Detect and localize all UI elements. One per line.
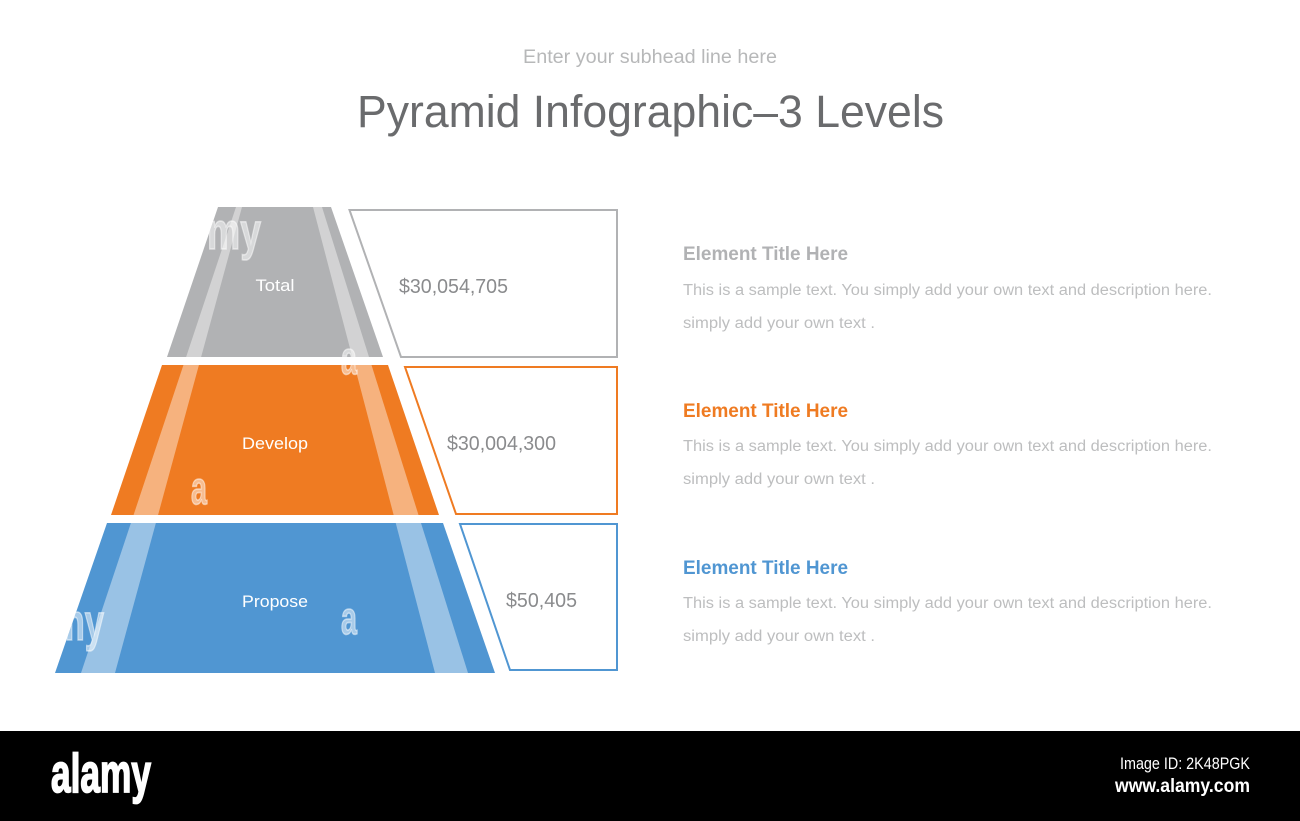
text block: element 3 bbox=[683, 558, 1212, 645]
text block: element 3: simply add your own text . bbox=[683, 628, 875, 645]
watermark fragments: a bbox=[341, 592, 357, 644]
watermark fragments: my bbox=[54, 594, 104, 652]
watermark fragments: a bbox=[191, 462, 207, 514]
watermark fragments: my bbox=[207, 203, 261, 261]
text block: element 2: Element Title Here bbox=[683, 401, 848, 422]
text block: element 1: Element Title Here bbox=[683, 244, 848, 265]
tier: develop: Develop bbox=[242, 434, 308, 453]
value box: total: $30,054,705 bbox=[399, 276, 508, 298]
tier: develop bbox=[111, 365, 439, 515]
value box: propose: $50,405 bbox=[506, 590, 577, 612]
text block: element 3: This is a sample text. You simply add your own text and description here. bbox=[683, 595, 1212, 612]
value box: develop: $30,004,300 bbox=[447, 433, 556, 455]
text block: element 2: This is a sample text. You simply add your own text and description here. bbox=[683, 438, 1212, 455]
text block: element 2: simply add your own text . bbox=[683, 471, 875, 488]
highlight stripes bbox=[81, 207, 468, 673]
pyramid bbox=[54, 203, 495, 673]
tier: propose: Propose bbox=[242, 592, 308, 611]
text block: element 1 bbox=[683, 244, 1212, 332]
subhead: Enter your subhead line here bbox=[523, 47, 777, 68]
watermark fragments bbox=[54, 203, 357, 652]
value box: total bbox=[350, 210, 617, 357]
text block: element 1: simply add your own text . bbox=[683, 315, 875, 332]
value box: develop bbox=[405, 367, 617, 514]
footer bar bbox=[0, 731, 1300, 821]
text block: element 1: This is a sample text. You simply add your own text and description here. bbox=[683, 282, 1212, 299]
watermark fragments: a bbox=[341, 332, 357, 384]
tier: total: Total bbox=[256, 276, 294, 295]
website: www.alamy.com bbox=[1114, 776, 1250, 797]
image id: Image ID: 2K48PGK bbox=[1120, 754, 1251, 773]
text block: element 2 bbox=[683, 401, 1212, 488]
tier: total bbox=[167, 207, 383, 357]
tier: propose bbox=[55, 523, 495, 673]
footer logo: alamy bbox=[51, 742, 151, 804]
title: Pyramid Infographic–3 Levels bbox=[357, 86, 944, 137]
value box: propose bbox=[460, 524, 617, 670]
text block: element 3: Element Title Here bbox=[683, 558, 848, 579]
